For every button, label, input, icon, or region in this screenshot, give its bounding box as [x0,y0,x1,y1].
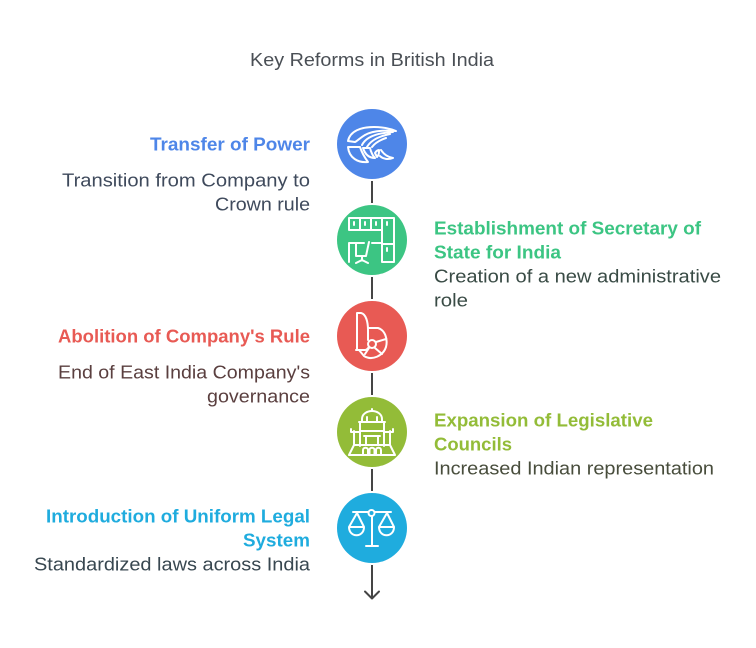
description: abolition of company's rule: End of East India Company's [58,362,310,382]
description: uniform legal system: Standardized laws across India [34,554,311,574]
icon: wave on blue circle [337,109,407,179]
heading: establishment of secretary of state: Establishment of Secretary of [434,218,702,238]
step 2: secretary of state [337,205,721,310]
description: transfer of power [62,170,310,214]
timeline connector with arrow [365,181,379,598]
heading: abolition of company's rule: Abolition of Company's Rule [58,326,310,346]
step 3: abolition of company's rule [58,301,407,406]
heading: introduction of uniform legal system [46,506,310,550]
heading: expansion of legislative councils: Expansion of Legislative [434,410,653,430]
heading: introduction of uniform legal system: Introduction of Uniform Legal [46,506,310,526]
icon: domed building on olive circle [337,397,407,467]
heading: establishment of secretary of state: State for India [434,242,562,262]
description: abolition of company's rule: governance [207,386,310,406]
step 5: uniform legal system [34,493,407,574]
title: Key Reforms in British India [250,50,495,70]
step 1: transfer of power [62,109,407,214]
heading: expansion of legislative councils: Councils [434,434,512,454]
heading: establishment of secretary of state [434,218,702,262]
description: transfer of power: Crown rule [215,194,310,214]
description: secretary of state: role [434,290,468,310]
description: transfer of power: Transition from Company to [62,170,310,190]
icon: scroll on red circle [337,301,407,371]
heading: expansion of legislative councils [434,410,653,454]
heading: transfer of power: Transfer of Power [150,134,310,154]
step 4: expansion of legislative councils [337,397,714,478]
icon: office layout on green circle [337,205,407,275]
description: secretary of state [434,266,721,310]
description: abolition of company's rule [58,362,310,406]
description: secretary of state: Creation of a new administrative [434,266,721,286]
heading: introduction of uniform legal system: System [243,530,310,550]
description: expansion of legislative councils: Increased Indian representation [434,458,714,478]
icon: scales on cyan circle [337,493,407,563]
